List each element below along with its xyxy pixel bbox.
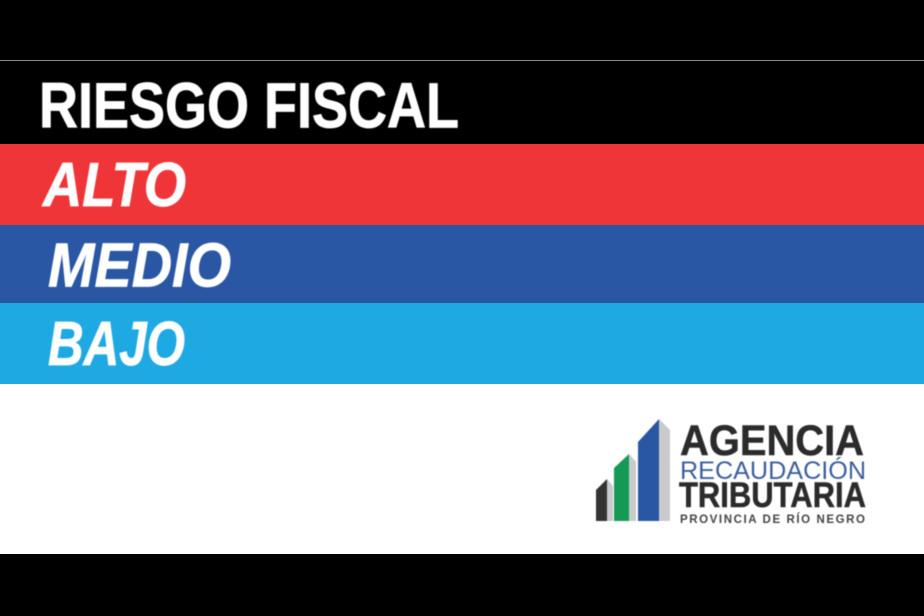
panel: white logo area <box>0 384 924 554</box>
top rule <box>0 60 924 61</box>
logo text: agencia: AGENCIA <box>680 417 864 465</box>
label: bajo: BAJO <box>48 310 185 379</box>
label: medio: MEDIO <box>48 232 231 300</box>
band: medio <box>0 225 924 303</box>
logo text: provincia: PROVINCIA DE RÍO NEGRO <box>680 513 865 526</box>
label: alto: ALTO <box>41 151 186 220</box>
logo icon: rising bars <box>596 419 670 521</box>
logo text: recaudacion: RECAUDACIÓN <box>680 456 866 485</box>
band: bajo <box>0 303 924 384</box>
title: RIESGO FISCAL <box>39 70 459 142</box>
band: alto <box>0 144 924 225</box>
logo text: tributaria: TRIBUTARIA <box>679 476 866 515</box>
